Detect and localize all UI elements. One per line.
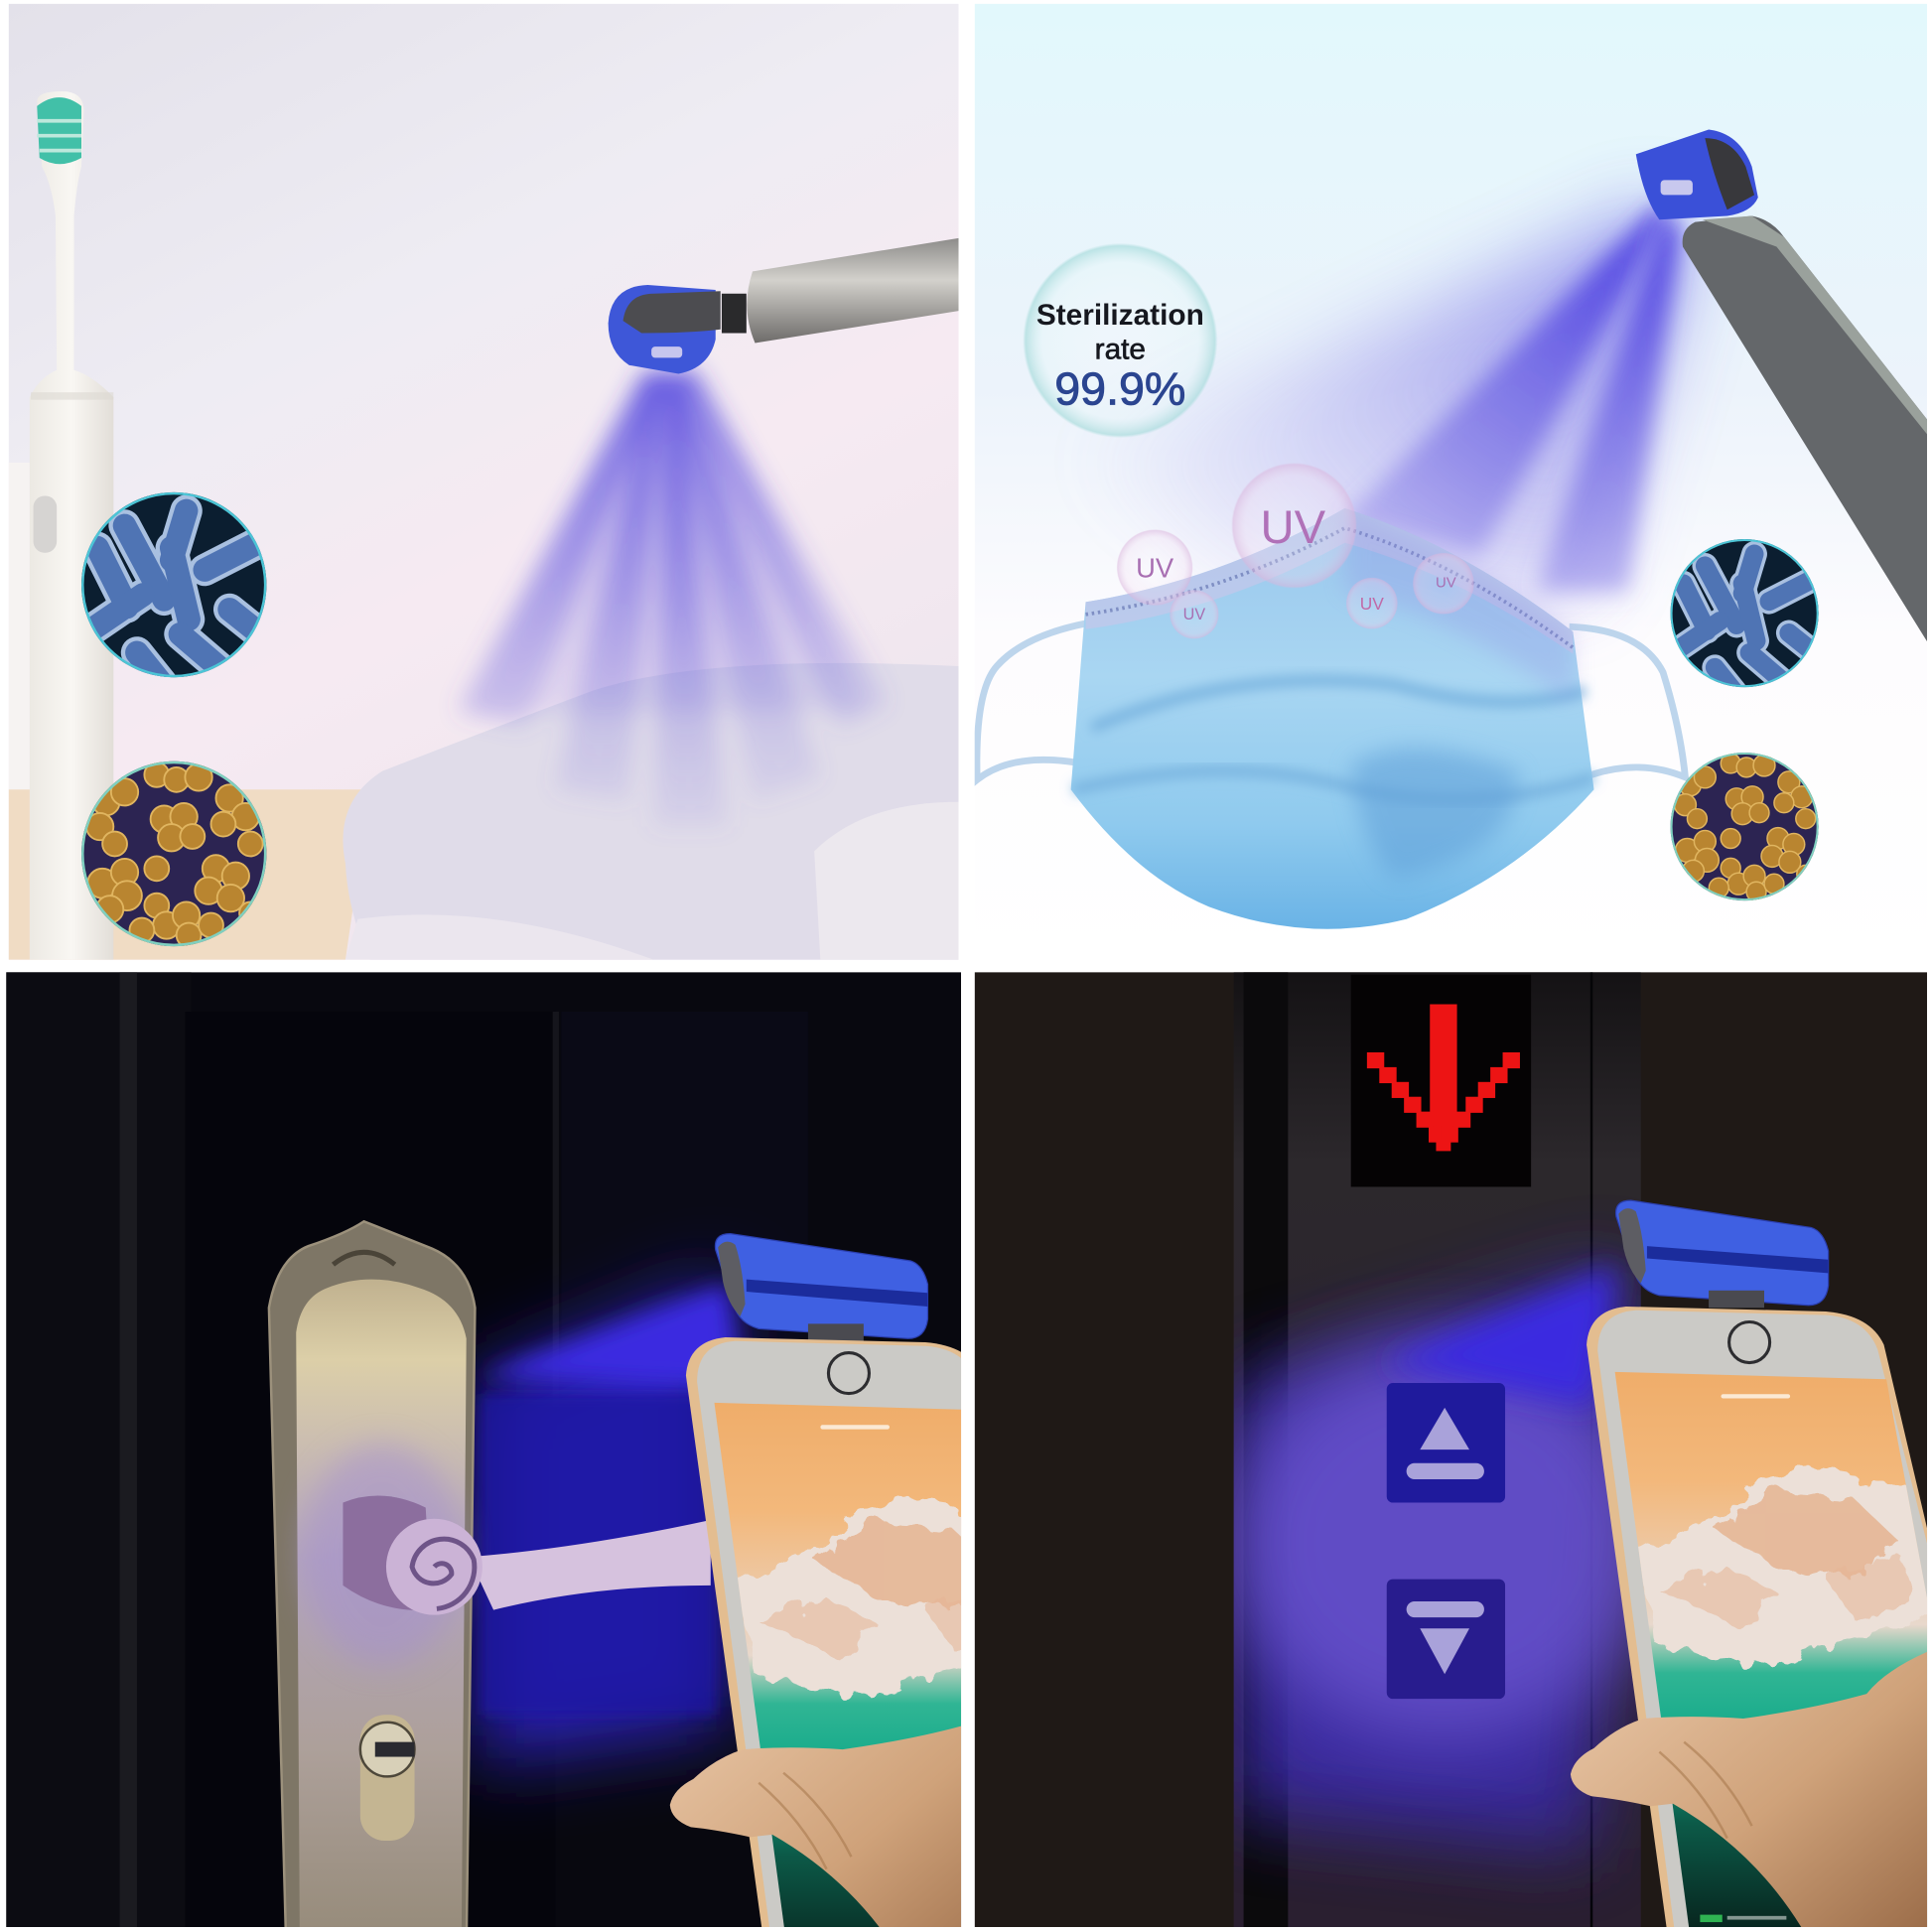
- door handle plate: [269, 1221, 475, 1932]
- UV bubble large: [1231, 463, 1357, 589]
- elevator direction display: down arrow: [1351, 975, 1531, 1186]
- UV bubble small 2: [1346, 578, 1398, 629]
- ear loops: [977, 623, 1685, 779]
- UV bubble large: UV: [1260, 501, 1326, 554]
- lock cylinder: [360, 1715, 415, 1841]
- panel: door handle sterilization: [6, 972, 1073, 1932]
- elevator button: up: [1387, 1383, 1505, 1503]
- UV device on phone: [715, 1234, 927, 1341]
- UV bubble small 3: UV: [1436, 576, 1456, 592]
- micrograph: cocci bacteria: [1671, 753, 1819, 901]
- callout bubble: sterilization rate: [1023, 243, 1218, 438]
- pillow: [343, 663, 959, 960]
- micrograph: cocci bacteria: [81, 761, 266, 947]
- toothbrush: [30, 91, 113, 960]
- face mask: [1071, 508, 1594, 929]
- UV device on phone: [1616, 1200, 1829, 1308]
- elevator button: down: [1387, 1580, 1505, 1699]
- callout bubble: sterilization rate: Sterilization: [1036, 299, 1204, 332]
- micrograph: rod bacteria: [81, 492, 266, 683]
- callout bubble: sterilization rate: rate: [1095, 334, 1146, 366]
- UV bubble medium: UV: [1136, 553, 1174, 584]
- micrograph: rod bacteria: [1671, 539, 1819, 692]
- panel: toothbrush and pillow sterilization: [9, 4, 959, 960]
- UV bubble medium: [1117, 529, 1193, 606]
- door lever: [343, 1496, 711, 1615]
- panel: face mask sterilization: [975, 4, 1927, 962]
- UV bubble small 2: UV: [1360, 594, 1384, 614]
- phone held in hand: [670, 1337, 1073, 1932]
- panel: elevator button sterilization: [975, 972, 1932, 1932]
- UV bubble small 1: UV: [1183, 606, 1205, 623]
- phone held in hand: [1571, 1307, 1932, 1932]
- UV light glow: [475, 1277, 741, 1764]
- UV device head: [609, 285, 721, 374]
- UV light beam: [1086, 204, 1693, 605]
- sterilizer tube: [722, 238, 959, 343]
- UV light beam: [457, 367, 889, 827]
- UV device head: [1636, 129, 1758, 219]
- UV bubble small 1: [1170, 590, 1219, 639]
- phone body: [1683, 215, 1927, 641]
- UV light glow: [1227, 1265, 1659, 1851]
- UV bubble small 3: [1413, 553, 1474, 615]
- callout bubble: sterilization rate: 99.9%: [1054, 363, 1185, 415]
